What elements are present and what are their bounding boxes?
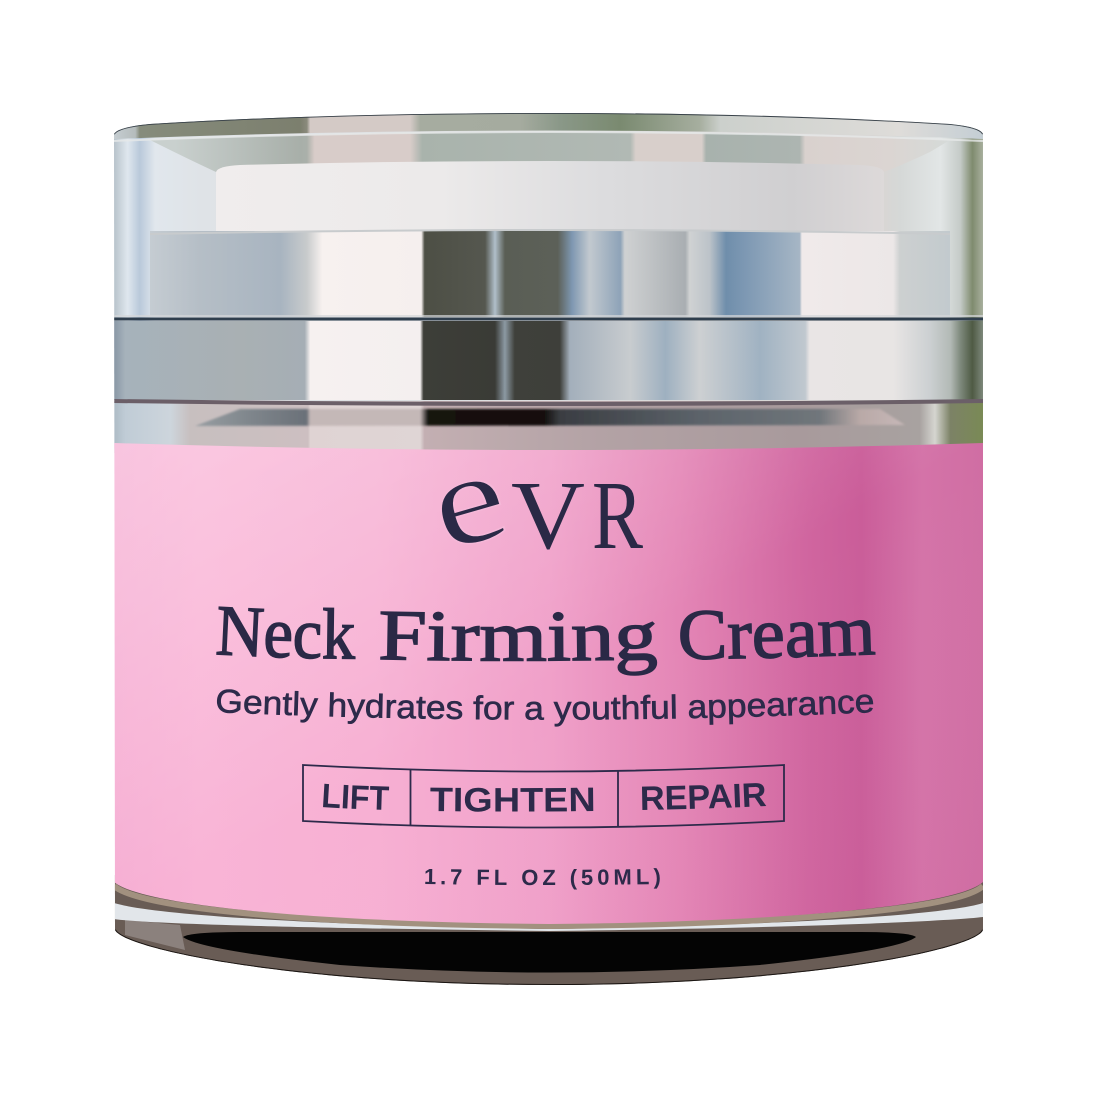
- LIFT: LIFT: [323, 784, 390, 810]
- brand logo: V: [511, 462, 585, 570]
- tagline: Gently hydrates for a youthful appearance: [216, 689, 874, 727]
- upper chrome band: [150, 231, 950, 317]
- volume text: 1.7 FL OZ (50ML): [425, 868, 660, 890]
- product title: [216, 606, 876, 676]
- product jar illustration: [114, 113, 983, 985]
- brand logo: e: [414, 422, 522, 578]
- product title: Cream: [680, 610, 876, 660]
- TIGHTEN: TIGHTEN: [430, 788, 594, 812]
- lid inner lens: [150, 132, 950, 172]
- bottom glass base: [114, 875, 983, 990]
- lower chrome band: [114, 321, 983, 400]
- glass lid: [114, 113, 983, 403]
- benefits box: [302, 764, 785, 828]
- brand logo: R: [592, 462, 643, 570]
- brand logo: [414, 422, 643, 578]
- dark groove: [114, 318, 983, 320]
- base side reflection: [125, 920, 185, 950]
- base dark edge: [115, 930, 983, 985]
- base reflection: [114, 903, 983, 931]
- product title: Firming: [380, 611, 658, 676]
- lid base edge: [114, 401, 983, 404]
- REPAIR: REPAIR: [642, 783, 766, 810]
- jar body: [114, 113, 983, 990]
- jar neck: [114, 401, 983, 453]
- product title: Neck: [216, 606, 356, 660]
- pink label: [114, 443, 983, 924]
- lid top rim: [114, 113, 983, 139]
- neck dark reflection: [195, 409, 905, 426]
- black inner base: [183, 932, 916, 972]
- white inner cap: [216, 161, 804, 231]
- label rim tan: [114, 886, 983, 926]
